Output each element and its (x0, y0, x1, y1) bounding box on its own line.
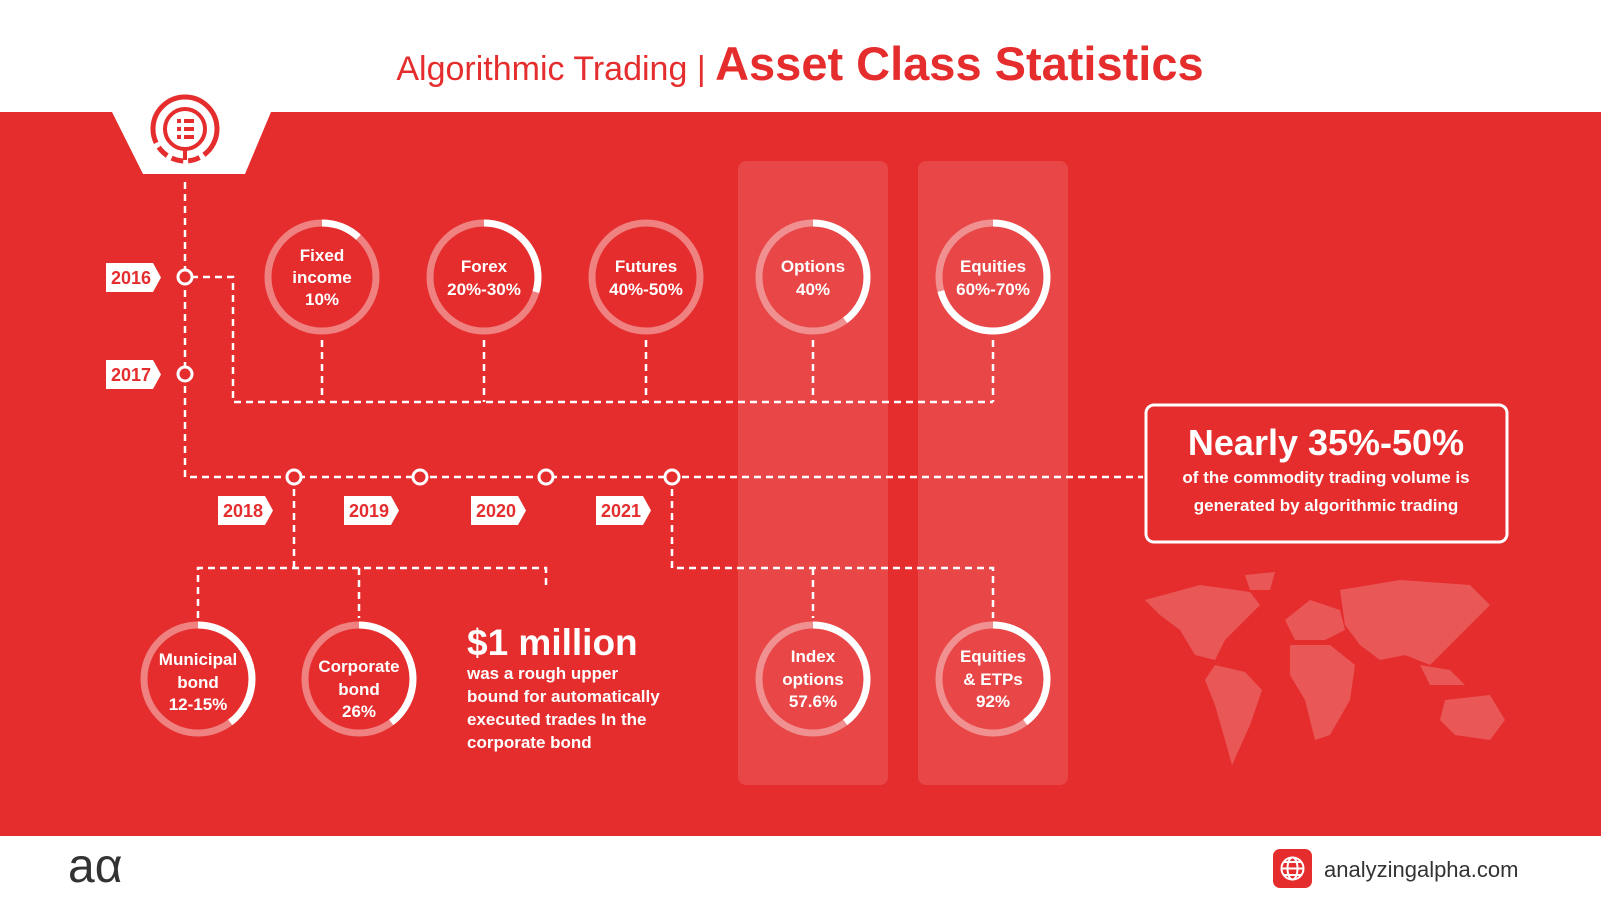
callout: commodity: generated by algorithmic trading (1194, 496, 1458, 515)
year tags: 2020 (476, 501, 516, 521)
text block: $1 million: corporate bond (467, 733, 592, 752)
circle labels: 57.6% (789, 692, 837, 711)
circle labels: 40%-50% (609, 280, 683, 299)
circle labels: Municipal (159, 650, 237, 669)
year tags (106, 263, 651, 525)
highlight column: options (738, 161, 888, 785)
text block: $1 million: bound for automatically (467, 687, 660, 706)
circle labels: Futures (615, 257, 677, 276)
text block: $1 million: $1 million (467, 622, 638, 663)
circle labels: Forex (461, 257, 508, 276)
year tags: 2016 (111, 268, 151, 288)
footer website: analyzingalpha.com (1324, 857, 1518, 882)
text block: $1 million: executed trades In the (467, 710, 647, 729)
circle labels: bond (338, 680, 380, 699)
icon: header badge (153, 97, 217, 161)
connectors (185, 182, 1143, 618)
callout: commodity: of the commodity trading volume is (1182, 468, 1470, 487)
circle labels: Index (791, 647, 836, 666)
circle labels: 12-15% (169, 695, 227, 714)
callout: commodity (1146, 405, 1507, 542)
footer logo: aα (68, 840, 122, 893)
stat circles (144, 223, 1047, 733)
circle labels: 26% (342, 702, 376, 721)
text block: $1 million (466, 622, 660, 752)
highlight column: equities (918, 161, 1068, 785)
circle labels: bond (177, 673, 219, 692)
footer website (1273, 849, 1518, 888)
circle labels: Equities (960, 647, 1026, 666)
circle labels: 10% (305, 290, 339, 309)
text block: $1 million: was a rough upper (466, 664, 619, 683)
circle labels: Equities (960, 257, 1026, 276)
year tags: 2021 (601, 501, 641, 521)
circle labels: 40% (796, 280, 830, 299)
circle labels: 92% (976, 692, 1010, 711)
circle labels: Options (781, 257, 845, 276)
circle labels: income (292, 268, 352, 287)
circle labels: & ETPs (963, 670, 1023, 689)
red background band (0, 112, 1601, 836)
timeline nodes (178, 270, 679, 484)
circle labels (159, 246, 1030, 721)
circle labels: 20%-30% (447, 280, 521, 299)
year tags: 2018 (223, 501, 263, 521)
circle labels: 60%-70% (956, 280, 1030, 299)
year tags: 2017 (111, 365, 151, 385)
callout: commodity: Nearly 35%-50% (1188, 422, 1464, 463)
circle labels: Fixed (300, 246, 344, 265)
world map (1145, 572, 1505, 765)
year tags: 2019 (349, 501, 389, 521)
title: Algorithmic Trading | Asset Class Statistics (396, 37, 1204, 90)
circle labels: Corporate (318, 657, 400, 676)
circle labels: options (782, 670, 844, 689)
